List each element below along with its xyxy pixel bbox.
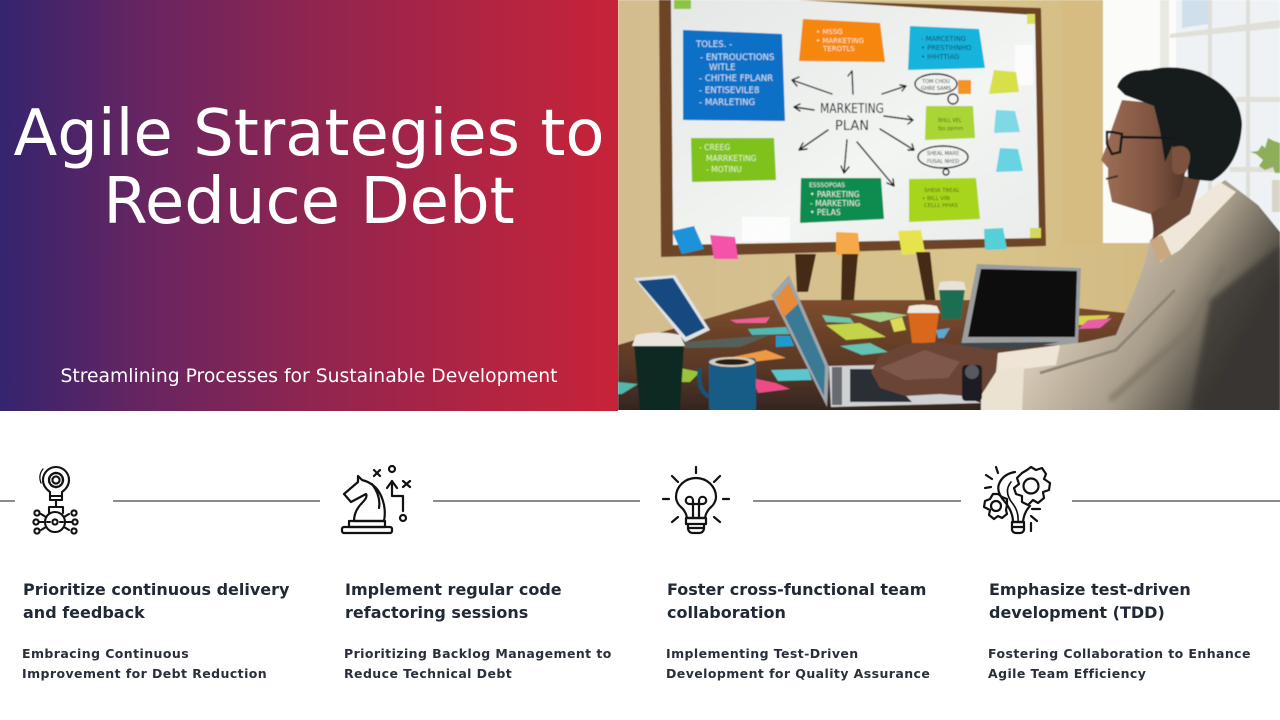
whiteboard <box>659 0 1046 257</box>
potted plant on window sill <box>1250 138 1280 212</box>
text block: column 2 description <box>344 646 612 680</box>
icon: light bulb with rays <box>662 466 730 534</box>
sticky note: yellow-green lower: CELLL HHAS <box>924 203 958 209</box>
text block: column 4 heading: Emphasize test-driven <box>989 580 1191 598</box>
orange cup <box>907 304 940 343</box>
text block: column 2 heading: Implement regular code <box>345 580 562 598</box>
text block: column 2 heading <box>345 580 562 622</box>
table <box>618 300 1180 411</box>
text block: column 2 heading: refactoring sessions <box>345 602 528 622</box>
text block: column 4 description: Fostering Collaboration to Enhance <box>988 646 1251 660</box>
man's hand and watch <box>871 342 998 401</box>
handwritten mind map: marketing plan <box>792 71 968 186</box>
sticky note: blue list: - ENTISEVILE8 <box>699 86 759 96</box>
text block: column 3 heading: Foster cross-functional team <box>667 580 926 598</box>
title <box>13 97 605 239</box>
text block: column 2 description: Reduce Technical Debt <box>344 666 512 680</box>
sticky note: blue list: - MARLETING <box>699 98 755 108</box>
title: Agile Strategies to <box>13 97 605 171</box>
sticky note: cyan: • IHHTTIAG <box>921 53 959 61</box>
text block: column 1 description: Improvement for Debt Reduction <box>22 666 267 680</box>
sticky note: yellow-green mid: BHLL VEL <box>938 118 962 124</box>
sticky note: yellow-green lower: SHEIA TREAL <box>924 188 961 194</box>
man's head in profile <box>1101 67 1242 240</box>
text block: column 1 description <box>22 646 267 680</box>
window with glazing bars <box>1103 0 1280 243</box>
icon: head-shaped bulb with gears <box>982 466 1052 534</box>
sticky note: lime left: MARRKETING <box>706 154 757 163</box>
sticky note: lime left: - MOTINU <box>706 165 742 174</box>
text block: column 1 description: Embracing Continuous <box>22 646 189 660</box>
sticky note: yellow-green lower: • BILL VIN <box>922 196 950 202</box>
center laptop <box>771 275 981 407</box>
text block: column 3 description: Development for Quality Assurance <box>666 666 930 680</box>
text block: column 1 heading: and feedback <box>23 602 145 622</box>
text block: column 4 description: Agile Team Efficiency <box>988 666 1146 680</box>
wall <box>618 0 1280 411</box>
text block: column 4 description <box>988 646 1251 680</box>
subtitle: Streamlining Processes for Sustainable Development <box>60 366 558 387</box>
sticky note: orange: TEROTLS <box>822 45 855 53</box>
green cup <box>938 281 966 319</box>
handwritten mind map: marketing plan: MARKETING <box>820 102 884 117</box>
text block: column 3 description <box>666 646 930 680</box>
sticky note: green <box>800 178 884 223</box>
handwritten mind map: marketing plan: TOM CHOU <box>921 79 950 85</box>
sticky note: blue list <box>683 30 785 121</box>
photo: man planning at a marketing whiteboard <box>618 0 1280 410</box>
scattered notes on table <box>618 312 1112 394</box>
text block: column 3 description: Implementing Test-Driven <box>666 646 859 660</box>
left laptop <box>634 275 770 348</box>
sticky note: green: • PARKETING <box>810 190 860 199</box>
sticky note: green: • PELAS <box>810 208 841 217</box>
handwritten mind map: marketing plan: FUSAL NHED <box>927 159 959 165</box>
small sticky notes around the board <box>672 0 1041 259</box>
sticky note: blue list: WITLE <box>709 63 736 73</box>
sticky note: orange: • MSSG <box>816 28 843 36</box>
text block: column 1 heading <box>23 580 290 622</box>
back laptop <box>960 264 1081 349</box>
sticky note: lime left: - CREEG <box>699 143 730 152</box>
icon: light bulb with gear above circuit node <box>32 466 79 535</box>
sticky note: blue list: - ENTROUCTIONS <box>700 53 774 63</box>
handwritten mind map: marketing plan: SHEAL MARE <box>927 151 959 157</box>
icon: chess knight strategy <box>340 464 412 534</box>
blue mug <box>699 357 756 411</box>
sticky note: orange: • MARKETING <box>816 37 864 45</box>
sticky note: blue list: - CHITHE FPLANR <box>699 74 773 84</box>
title: Reduce Debt <box>103 165 515 239</box>
sticky note: green: ESSSOPOAS <box>809 182 845 189</box>
text block: column 3 heading <box>667 580 926 622</box>
easel legs <box>795 252 936 305</box>
sticky note: blue list: TOLES. - <box>695 40 732 50</box>
sticky note: yellow-green mid: fps ppmm <box>938 126 963 132</box>
text block: column 4 heading <box>989 580 1191 622</box>
sticky note: yellow-green mid <box>925 106 975 140</box>
text block: column 2 description: Prioritizing Backlog Management to <box>344 646 612 660</box>
dark green paper cup <box>632 332 685 411</box>
man's shirt and arms <box>981 180 1280 411</box>
sticky note: cyan <box>908 26 985 70</box>
text block: column 4 heading: development (TDD) <box>989 602 1165 622</box>
sticky note: cyan: • PRESTIHNHO <box>921 44 971 52</box>
handwritten mind map: marketing plan: PLAN <box>835 119 869 134</box>
handwritten mind map: marketing plan: GHRE SAMS <box>921 86 951 92</box>
sticky note: orange <box>799 19 885 62</box>
text block: column 1 heading: Prioritize continuous delivery <box>23 580 289 598</box>
sticky note: green: - MARKETING <box>810 199 861 208</box>
sticky note: lime left <box>691 138 776 182</box>
text block: column 3 heading: collaboration <box>667 602 786 622</box>
panel: gradient title banner <box>0 0 618 411</box>
sticky note: yellow-green lower <box>909 178 980 222</box>
sticky note: cyan: - MARCETING <box>921 35 966 43</box>
